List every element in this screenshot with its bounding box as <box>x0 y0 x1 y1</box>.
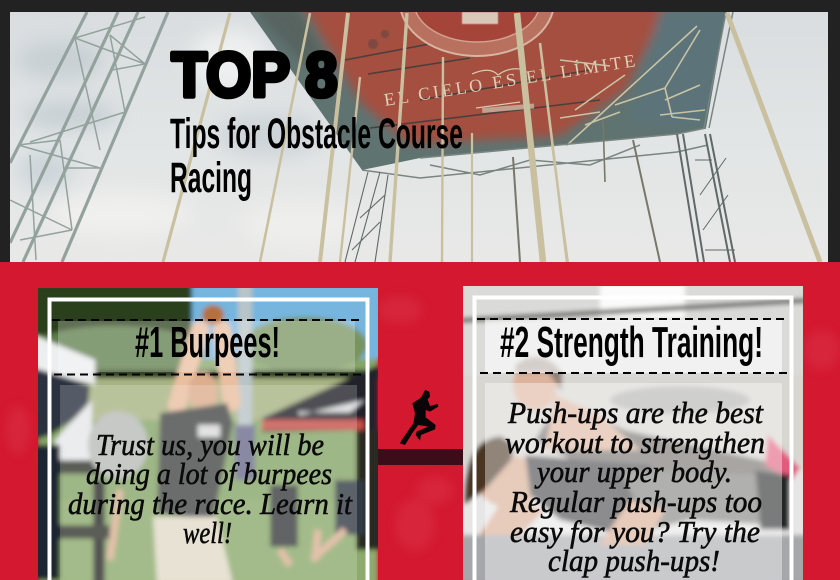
text: strength training body: clap push-ups! <box>548 543 720 578</box>
title: TOP 8: TOP 8 <box>172 40 338 110</box>
header translucent panel <box>58 321 355 372</box>
text: burpees body: doing a lot of burpees <box>86 456 332 491</box>
panel: tip 2 strength training <box>459 282 807 580</box>
hero photo: obstacle course rig <box>10 0 828 262</box>
white frame <box>474 298 792 580</box>
text: burpees body: during the race. Learn it <box>68 486 353 521</box>
text: burpees body: well! <box>183 515 232 550</box>
text: strength training body: Regular push-ups too <box>509 484 762 519</box>
text: strength training body: workout to strengthen <box>505 425 765 460</box>
dashed rule bottom <box>54 374 362 376</box>
woman <box>511 370 558 412</box>
subtitle: Tips for Obstacle Course <box>170 110 463 158</box>
dashed rule top <box>52 319 362 321</box>
man <box>478 456 542 508</box>
subtitle <box>170 110 463 202</box>
heading: burpees: #1 Burpees! <box>135 318 280 367</box>
header translucent panel <box>485 320 782 373</box>
photo: push-ups in a gym <box>459 282 807 580</box>
icon: running figure <box>400 390 438 445</box>
red lower section background <box>0 262 840 580</box>
body translucent panel <box>485 383 782 580</box>
photo: man doing burpees <box>25 284 382 580</box>
dashed rule bottom <box>480 372 790 374</box>
body translucent panel <box>60 385 357 580</box>
text: burpees body <box>68 427 353 550</box>
connector bar <box>378 449 463 465</box>
subtitle: Racing <box>170 154 252 202</box>
text: strength training body: Push-ups are the best <box>507 395 764 430</box>
dashed rule top <box>477 318 788 320</box>
banner lettering: EL CIELO ES EL LÍMITE <box>382 49 636 110</box>
text: strength training body: easy for you? Try the <box>510 514 760 549</box>
text: burpees body: Trust us, you will be <box>96 427 324 462</box>
text: strength training body: your upper body. <box>534 454 732 489</box>
panel: tip 1 burpees <box>25 284 382 580</box>
white frame <box>50 300 368 580</box>
text: strength training body <box>505 395 765 578</box>
